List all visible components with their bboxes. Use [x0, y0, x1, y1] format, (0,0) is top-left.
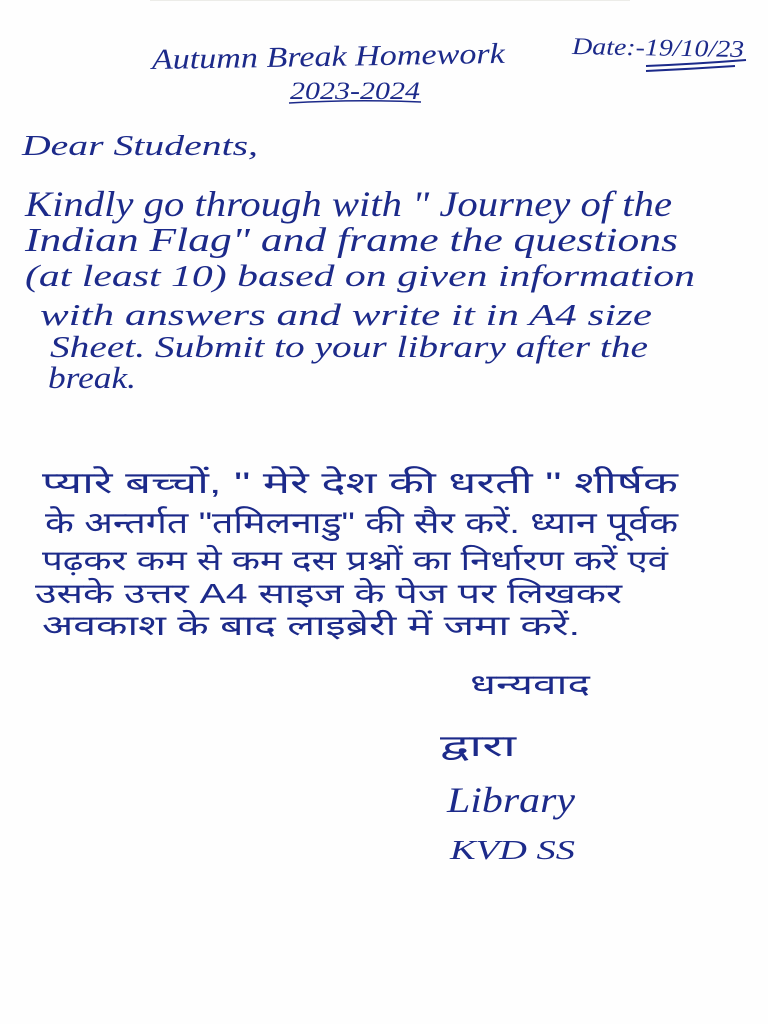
sign-off: KVD SS	[449, 835, 576, 865]
sign-off	[440, 669, 592, 865]
Hindi message: के अन्तर्गत "तमिलनाडु" की सैर करें. ध्यान पूर्वक	[45, 506, 679, 542]
Hindi message: पढ़कर कम से कम दस प्रश्नों का निर्धारण करें एवं	[42, 544, 669, 576]
title: Autumn Break Homework	[149, 38, 506, 76]
English message	[24, 184, 695, 395]
Hindi message: उसके उत्तर A4 साइज के पेज पर लिखकर	[35, 577, 623, 609]
English message: (at least 10) based on given information	[25, 258, 695, 293]
title: 2023-2024	[290, 78, 420, 105]
English message: Indian Flag" and frame the questions	[24, 222, 678, 259]
Hindi message: प्यारे बच्चों, " मेरे देश की धरती " शीर्षक	[42, 466, 679, 500]
English message: Kindly go through with " Journey of the	[24, 184, 672, 224]
sign-off: Library	[446, 780, 575, 820]
sign-off: धन्यवाद	[470, 669, 592, 700]
salutation: Dear Students,	[21, 131, 258, 162]
Hindi message	[35, 466, 679, 641]
date: Date:-19/10/23	[571, 34, 744, 63]
date	[571, 34, 746, 71]
Hindi message: अवकाश के बाद लाइब्रेरी में जमा करें.	[42, 609, 580, 641]
English message: Sheet. Submit to your library after the	[50, 329, 648, 364]
sign-off: द्वारा	[440, 730, 518, 763]
English message: break.	[48, 360, 136, 395]
title	[149, 38, 506, 105]
English message: with answers and write it in A4 size	[40, 297, 652, 332]
